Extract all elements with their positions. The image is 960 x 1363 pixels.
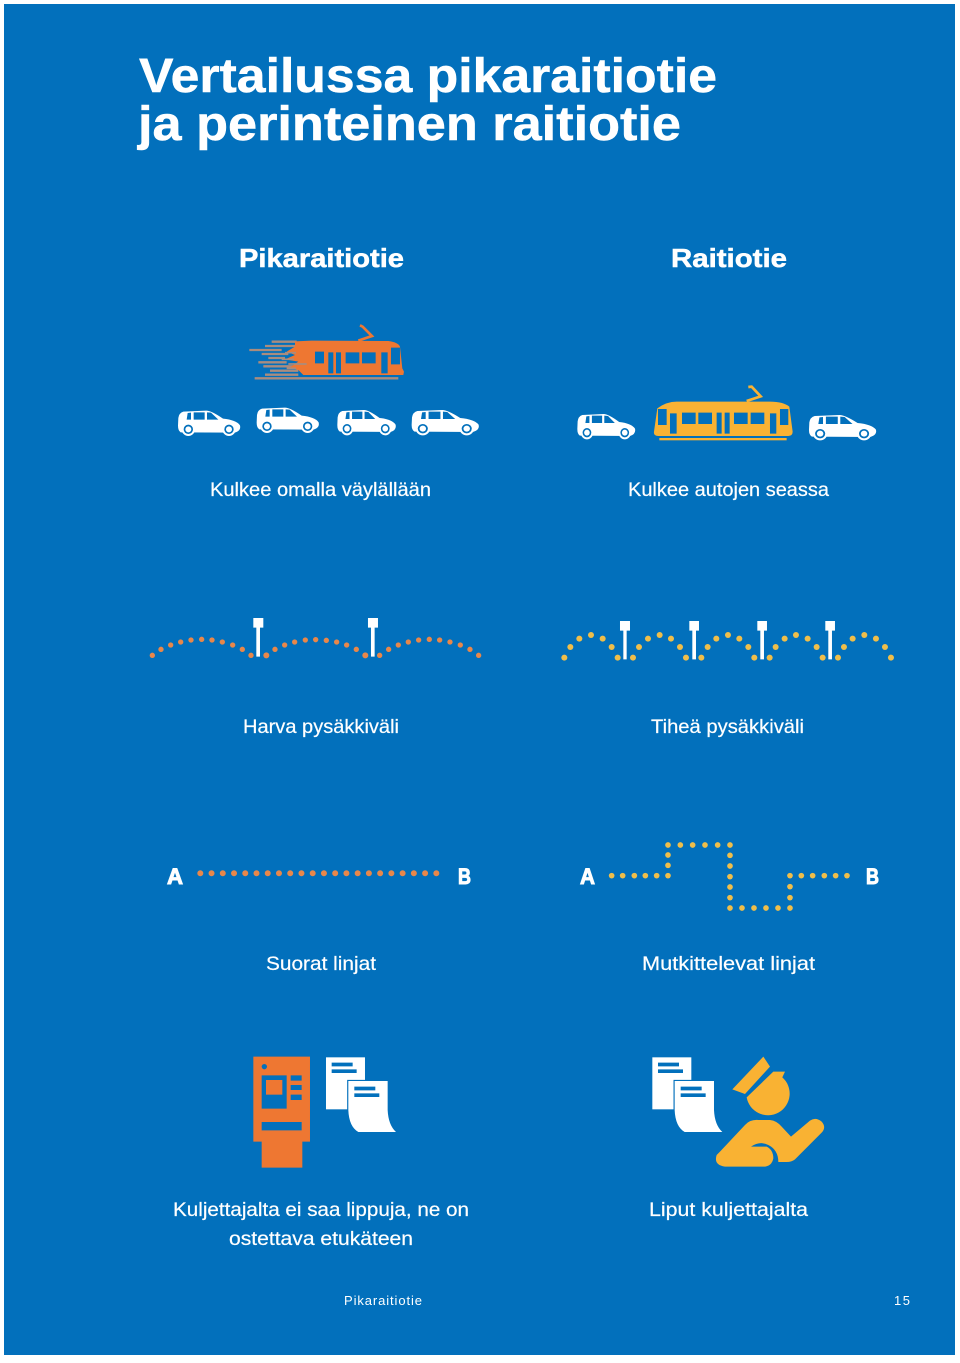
- icon: yellow tram among cars: [577, 387, 876, 440]
- icon: tickets and conductor: [652, 1057, 824, 1167]
- heading: Raitiotie: Raitiotie: [671, 243, 787, 273]
- chart: winding line A to B: A: [580, 864, 595, 889]
- label: Kulkee omalla väylällään: Kulkee omalla väylällään: [210, 479, 431, 501]
- icon: fast orange tram: [249, 325, 404, 378]
- icon: tickets: [326, 1057, 396, 1132]
- label: Suorat linjat: Suorat linjat: [266, 953, 377, 975]
- label: Mutkittelevat linjat: Mutkittelevat linjat: [642, 953, 816, 975]
- footer: publication name: Pikaraitiotie: [344, 1293, 422, 1308]
- chart: straight line A to B: A: [167, 864, 183, 889]
- label: Kulkee autojen seassa: Kulkee autojen seassa: [628, 479, 829, 501]
- label: Liput kuljettajalta: Liput kuljettajalta: [649, 1199, 808, 1221]
- chart: straight line A to B: [167, 864, 471, 889]
- footer: page number: 15: [894, 1293, 910, 1308]
- icon: cars around fast tram: [178, 408, 479, 436]
- label: Kuljettajalta ei saa lippuja: Kuljettajalta ei saa lippuja, ne on: [173, 1199, 469, 1221]
- heading: Pikaraitiotie: Pikaraitiotie: [239, 243, 404, 273]
- label: Tiheä pysäkkiväli: Tiheä pysäkkiväli: [651, 716, 804, 738]
- label: Harva pysäkkiväli: Harva pysäkkiväli: [243, 716, 399, 738]
- chart: winding line A to B: B: [866, 864, 879, 889]
- title: Vertailussa pikaraitiotie: [139, 50, 717, 103]
- title: ja perinteinen raitiotie: [137, 98, 681, 151]
- icon: ticket machine: [253, 1057, 310, 1168]
- label: Kuljettajalta ei saa lippuja: ostettava etukäteen: [229, 1228, 413, 1250]
- chart: dense stops: [561, 621, 894, 661]
- chart: sparse stops: [150, 618, 481, 658]
- chart: winding line A to B: [580, 842, 879, 911]
- chart: straight line A to B: B: [458, 864, 471, 889]
- label: Kuljettajalta ei saa lippuja: [173, 1199, 469, 1250]
- title: [137, 50, 717, 151]
